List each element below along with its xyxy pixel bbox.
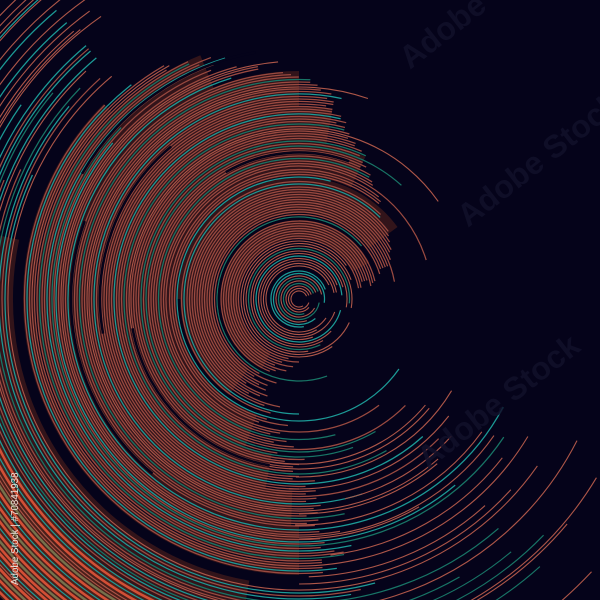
credit: stock number: Adobe Stock | #70841938 [10,472,21,585]
watermark: Adobe Stock: Adobe Stock [410,327,587,476]
rings: inner core [218,218,380,380]
watermark: Adobe Stock [392,0,600,476]
